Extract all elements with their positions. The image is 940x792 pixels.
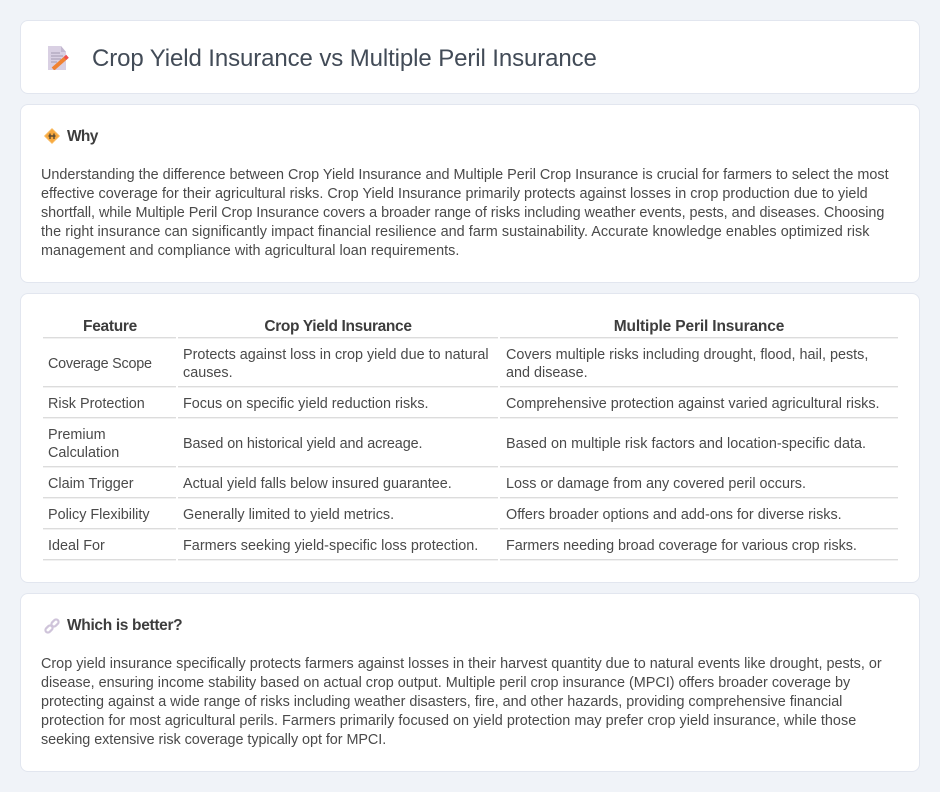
text: which is better paragraph xyxy=(41,656,882,748)
row: coverage scope xyxy=(48,347,868,381)
row: premium calculation: Calculation xyxy=(48,445,119,461)
text: which is better paragraph: seeking extensive risk coverage typically opt for MPCI. xyxy=(41,732,386,748)
text: why paragraph: the right insurance can significantly impact financial resilience and farm sustainability. Accurate knowledge enables optimized risk xyxy=(41,224,869,240)
row: risk protection: Risk Protection xyxy=(48,396,145,412)
table header xyxy=(83,318,784,335)
text: which is better paragraph: disease, ensuring income stability based on actual crop output. Multiple peril crop insurance (MPCI) offers broader coverage by xyxy=(41,675,850,691)
row: claim trigger: Loss or damage from any covered peril occurs. xyxy=(506,476,806,492)
row: policy flexibility: Generally limited to yield metrics. xyxy=(183,507,394,523)
heading: which is better: Which is better? xyxy=(67,617,182,634)
row: ideal for: Farmers needing broad coverage for various crop risks. xyxy=(506,538,857,554)
text: why paragraph xyxy=(41,167,889,259)
icon: warning diamond xyxy=(44,128,60,144)
row: coverage scope: and disease. xyxy=(506,365,588,381)
row: premium calculation: Based on multiple risk factors and location-specific data. xyxy=(506,436,866,452)
row: ideal for: Farmers seeking yield-specific loss protection. xyxy=(183,538,478,554)
row: premium calculation: Premium xyxy=(48,427,106,443)
row: risk protection: Comprehensive protection against varied agricultural risks. xyxy=(506,396,880,412)
text: which is better paragraph: protection for most agricultural perils. Farmers primarily focused on yield protection may prefer crop yield insurance, while those xyxy=(41,713,856,729)
panel: why xyxy=(20,104,920,283)
row: coverage scope: causes. xyxy=(183,365,233,381)
table header: Feature xyxy=(83,318,137,335)
row: coverage scope: Protects against loss in crop yield due to natural xyxy=(183,347,489,363)
panel: title xyxy=(20,20,920,94)
text: why paragraph: effective coverage for their agricultural risks. Crop Yield Insurance primarily protects against losses in crop production due to yield xyxy=(41,186,868,202)
row: claim trigger: Claim Trigger xyxy=(48,476,134,492)
text: which is better paragraph: Crop yield insurance specifically protects farmers against losses in their harvest quantity due to natural events like drought, pests, or xyxy=(41,656,882,672)
row: claim trigger xyxy=(48,476,806,492)
table header: Crop Yield Insurance xyxy=(264,318,412,335)
heading: page title: Crop Yield Insurance vs Multiple Peril Insurance xyxy=(92,45,597,72)
icon: chain link xyxy=(44,618,60,634)
row: ideal for xyxy=(48,538,857,554)
row: coverage scope: Covers multiple risks including drought, flood, hail, pests, xyxy=(506,347,868,363)
row: policy flexibility xyxy=(48,507,842,523)
row: policy flexibility: Policy Flexibility xyxy=(48,507,150,523)
row: premium calculation xyxy=(48,427,866,461)
icon: document with pencil xyxy=(48,46,69,70)
table header: Multiple Peril Insurance xyxy=(614,318,784,335)
row: coverage scope: Coverage Scope xyxy=(48,356,152,372)
row: risk protection: Focus on specific yield reduction risks. xyxy=(183,396,429,412)
row: ideal for: Ideal For xyxy=(48,538,105,554)
text: why paragraph: shortfall, while Multiple Peril Crop Insurance covers a broader range of risks including weather events, pests, and diseases. Choosing xyxy=(41,205,884,221)
row: premium calculation: Based on historical yield and acreage. xyxy=(183,436,422,452)
row: policy flexibility: Offers broader options and add-ons for diverse risks. xyxy=(506,507,842,523)
panel: which is better xyxy=(20,593,920,772)
text: why paragraph: management and compliance with agricultural loan requirements. xyxy=(41,243,459,259)
heading: why: Why xyxy=(67,128,98,145)
row: risk protection xyxy=(48,396,880,412)
panel: comparison table xyxy=(20,293,920,583)
text: why paragraph: Understanding the difference between Crop Yield Insurance and Multiple Peril Crop Insurance is crucial for farmers to select the most xyxy=(41,167,889,183)
row: claim trigger: Actual yield falls below insured guarantee. xyxy=(183,476,452,492)
text: which is better paragraph: protecting against a wide range of risks including weather disasters, fire, and other hazards, providing comprehensive financial xyxy=(41,694,842,710)
